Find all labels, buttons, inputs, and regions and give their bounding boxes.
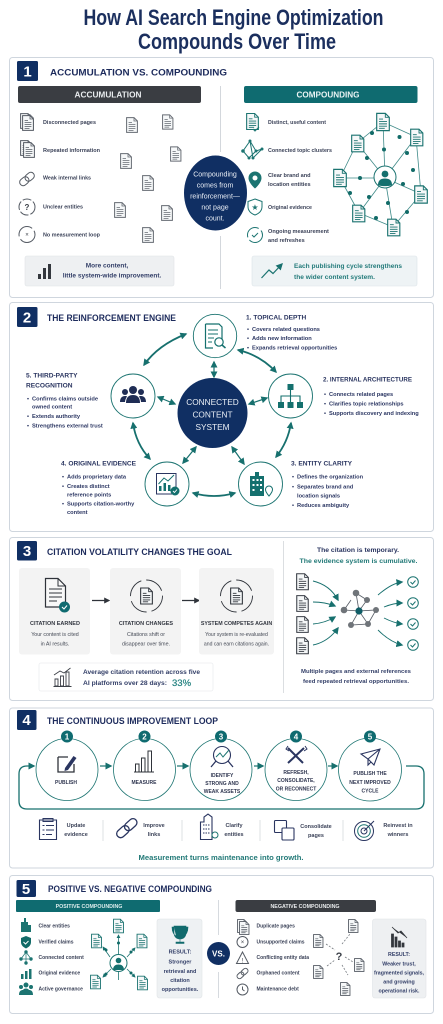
item: original evidence: ★ [251,203,259,212]
step 3: identify: WEAK ASSETS [204,789,241,795]
icon: document in cycle [220,580,252,612]
step 1: publish [36,730,98,800]
compounding header [244,86,418,103]
step 5: publish next cycle: CYCLE [362,788,379,794]
heading: citation is temporary: The evidence system is cumulative. [300,558,418,565]
result: negative [372,919,426,998]
negative list [236,920,309,995]
text: topical depth: Covers related questions [252,327,320,333]
card: citation earned: CITATION EARNED [30,621,80,627]
text: entity clarity: Reduces ambiguity [297,503,350,509]
callout: central message: count. [205,216,225,222]
text: third-party recognition: 5. THIRD-PARTY [26,372,78,380]
action: clarify entities [200,814,244,840]
card: citation earned: in AI results. [41,642,69,648]
panel: the reinforcement engine [10,302,434,532]
item: maintenance debt: Maintenance debt [256,986,299,992]
text: third-party recognition: • [27,414,29,420]
result: positive: opportunities. [162,987,199,993]
result: positive: Stronger [169,960,192,966]
result: negative: RESULT: [388,952,410,958]
compounding header: COMPOUNDING [296,90,360,100]
section number 2 [17,307,38,327]
heading: citation is temporary [300,547,418,565]
icon: trophy [172,926,188,944]
text: entity clarity: 3. ENTITY CLARITY [291,460,353,468]
node 2: internal architecture icon [268,374,312,418]
action: improve links: links [148,832,160,838]
node 4: original evidence icon [145,462,189,506]
text: original evidence: Adds proprietary data [67,474,127,480]
compounding list [241,113,332,244]
text: third-party recognition: Strengthens external trust [32,424,103,430]
positive header: POSITIVE COMPOUNDING [56,904,122,910]
result: negative: fragmented signals, [374,970,425,976]
card: citation earned [19,568,90,654]
negative header: NEGATIVE COMPOUNDING [270,904,340,910]
text: internal architecture: 2. INTERNAL ARCHITECTURE [323,376,413,384]
item: connected content: Connected content [38,955,84,961]
callout: central message [184,156,247,230]
step 5: publish next cycle [338,730,402,801]
item: unclear entities: ? [25,203,30,212]
section number 3: 3 [23,543,31,560]
cycle arrows [133,334,291,496]
action: consolidate pages: Consolidate [300,824,332,830]
text: third-party recognition: Confirms claims outside [32,396,98,402]
node 3: entity clarity icon [238,462,282,506]
text: internal architecture: Connects related pages [329,392,393,398]
card: citation changes: Citations shift or [127,632,165,638]
step 2: measure: MEASURE [131,780,157,786]
section heading: CITATION VOLATILITY CHANGES THE GOAL [47,547,232,557]
item: duplicate pages: Duplicate pages [256,924,295,930]
text: third-party recognition: • [27,396,29,402]
item: distinct content: Distinct, useful content [268,120,326,126]
callout: central message: Compounding [193,172,237,178]
text: original evidence: 4. ORIGINAL EVIDENCE [61,460,137,468]
hub: connected content system [178,378,248,448]
section number 3 [17,541,37,560]
node 1: topical depth icon [193,314,237,358]
return loop arrow [19,766,424,809]
stat: citation retention: 33% [172,678,192,689]
text: original evidence: content [67,510,88,516]
card: citation changes: disappear over time. [122,642,170,648]
item: conflicting data: ! [242,958,244,964]
icon: person [110,954,127,972]
card: system competes again: and can earn citations again. [204,642,269,648]
step 3: identify: 3 [219,732,224,742]
item: clear brand: location entities [268,182,311,188]
action: reinvest in winners: Reinvest in [383,823,413,829]
arrow [92,600,109,602]
section number 4: 4 [22,712,31,729]
text: multiple pages: feed repeated retrieval opportunities. [303,679,409,685]
VS badge [207,942,230,965]
action: clarify entities: entities [224,832,244,838]
hub: connected content system: CONTENT [192,410,233,420]
item: no measurement loop [19,226,101,242]
step 3: identify: IDENTIFY [211,773,234,779]
caption: measurement turns maintenance: Measurement turns maintenance into growth. [138,853,304,862]
positive header [16,900,160,912]
callout: more content: little system-wide improvement. [63,272,161,280]
item: unsupported claims [237,936,305,948]
step 5: publish next cycle: 5 [368,732,373,742]
text: topical depth [246,314,337,352]
item: orphaned content: Orphaned content [256,970,300,976]
action: update evidence: evidence [64,832,88,838]
title [84,5,384,54]
accumulation header: ACCUMULATION [74,90,142,100]
text: original evidence: • [62,474,64,480]
callout: more content [25,256,174,286]
item: repeated information: Repeated information [43,148,101,154]
hub: connected content system: CONNECTED [186,397,239,407]
step 2: measure [114,730,176,800]
callout: central message: comes from [197,182,233,190]
item: original evidence: Original evidence [38,970,80,976]
item: unclear entities: Unclear entities [43,204,83,210]
title: Compounds Over Time [138,29,336,54]
VS badge: VS. [212,950,225,958]
section heading: POSITIVE VS. NEGATIVE COMPOUNDING [48,884,212,894]
step 4: refresh: CONSOLIDATE, [277,778,315,784]
text: original evidence [61,460,137,516]
diagram: negative disconnected network [314,920,364,995]
diagram: positive network [91,919,147,990]
item: disconnected pages: Disconnected pages [43,120,96,126]
text: topical depth: • [247,327,249,333]
action: clarify entities: Clarify [225,823,243,829]
section number 2: 2 [23,310,31,326]
text: multiple pages [301,669,411,685]
text: multiple pages: Multiple pages and external references [301,669,411,675]
result: negative: Weaker trust, [382,962,416,968]
section heading: THE CONTINUOUS IMPROVEMENT LOOP [47,716,218,726]
network diagram: connected pages [334,113,427,236]
stat: citation retention: Average citation retention across five [83,669,201,676]
item: connected clusters: Connected topic clusters [268,148,332,154]
diagram: documents feed network to checks [297,574,418,654]
section heading: THE REINFORCEMENT ENGINE [47,313,176,323]
card: citation earned: Your content is cited [31,632,79,638]
result: positive: citation [170,978,190,984]
step arrows [100,765,337,767]
item: ongoing measurement [248,228,329,244]
callout: more content: More content, [86,262,128,270]
action: update evidence [40,818,88,840]
step 3: identify: STRONG AND [205,781,239,787]
action: consolidate pages: pages [308,833,324,839]
text: internal architecture: • [324,392,326,398]
text: topical depth: • [247,336,249,342]
action: reinvest in winners [354,821,413,840]
item: original evidence: Original evidence [268,205,312,211]
step 2: measure: 2 [142,732,147,742]
item: active governance: Active governance [38,986,83,992]
text: original evidence: Supports citation-worthy [67,502,135,508]
text: original evidence: reference points [67,492,111,498]
callout: central message: reinforcement— [190,194,240,200]
section number 5 [16,880,36,898]
step 4: refresh: REFRESH, [283,770,309,776]
negative header [236,900,376,912]
text: entity clarity: • [292,503,294,509]
section number 1: 1 [23,64,32,80]
text: internal architecture: Clarifies topic relationships [329,402,404,408]
panel: accumulation vs compounding [10,58,434,298]
item: clear brand: Clear brand and [268,173,311,179]
item: weak internal links: Weak internal links [43,176,91,182]
accumulation list [18,114,101,242]
text: internal architecture: Supports discovery and indexing [329,411,419,417]
panel: positive vs negative compounding [10,876,434,1014]
section number 1 [17,61,38,81]
action: consolidate pages [274,820,332,840]
item: conflicting data: Conflicting entity data [256,955,309,961]
panel: citation volatility [10,538,434,700]
item: ongoing measurement: and refreshes [268,238,305,244]
callout: each publishing cycle [252,256,417,286]
item: no measurement loop: × [25,232,29,238]
text: third-party recognition: owned content [32,404,72,410]
item: no measurement loop: No measurement loop [43,232,101,238]
result: positive: retrieval and [164,969,196,975]
icon: document with check [46,578,70,612]
text: entity clarity [291,460,364,509]
text: entity clarity: Separates brand and [297,484,354,490]
item: ongoing measurement: Ongoing measurement [268,229,329,235]
text: entity clarity: • [292,484,294,490]
item: unclear entities [19,199,83,215]
action: improve links: Improve [143,823,165,829]
card: citation changes: CITATION CHANGES [119,621,173,627]
result: positive [157,919,202,998]
action: reinvest in winners: winners [387,832,408,838]
text: internal architecture: • [324,411,326,417]
text: entity clarity: location signals [297,494,340,500]
step 1: publish: 1 [65,732,70,742]
step 4: refresh: OR RECONNECT [276,786,316,792]
card: system competes again [199,568,274,654]
text: internal architecture [323,376,419,417]
hub: connected content system: SYSTEM [195,422,230,432]
section number 5: 5 [22,881,30,898]
node 5: third-party recognition icon [111,374,155,418]
step 5: publish next cycle: NEXT IMPROVED [349,780,391,786]
accumulation header [18,86,201,103]
text: topical depth: Expands retrieval opportunities [252,346,337,352]
panel: continuous improvement loop [10,708,434,868]
arrow [182,600,199,602]
heading: citation is temporary: The citation is temporary. [317,547,399,554]
result: negative: and growing [383,980,415,986]
scattered documents [115,115,181,242]
item: clear brand [248,172,311,188]
card: system competes again: Your system is re-evaluated [205,632,268,638]
text: entity clarity: Defines the organization [297,474,364,480]
text: third-party recognition: Extends authority [32,414,81,420]
callout: each publishing cycle: the wider content system. [294,274,375,281]
item: original evidence [248,199,312,215]
text: internal architecture: • [324,402,326,408]
step 3: identify [190,730,252,800]
step 1: publish: PUBLISH [55,780,77,786]
callout: central message: not page [201,204,229,212]
card: citation changes [110,568,181,654]
stat: citation retention [39,663,213,691]
action: update evidence: Update [67,823,85,829]
step 4: refresh [265,730,327,800]
item: unsupported claims: × [241,940,245,946]
text: third-party recognition: • [27,424,29,430]
section number 4 [17,710,36,730]
stat: citation retention: AI platforms over 28 days: [83,680,167,687]
item: unsupported claims: Unsupported claims [256,940,305,946]
section heading: ACCUMULATION VS. COMPOUNDING [50,68,227,78]
item: verified claims: Verified claims [38,940,74,946]
diagram: negative disconnected network: ? [336,951,343,963]
text: third-party recognition [26,372,103,430]
item: clear entities: Clear entities [38,924,70,930]
item: conflicting data [236,952,309,964]
text: original evidence: Creates distinct [67,484,110,490]
result: positive: RESULT: [169,950,192,956]
text: topical depth: Adds new information [252,336,312,342]
icon: central person [374,166,396,188]
action: improve links [115,817,165,839]
text: topical depth: 1. TOPICAL DEPTH [246,314,306,322]
callout: each publishing cycle: Each publishing cycle strengthens [294,263,402,270]
step 4: refresh: 4 [294,732,299,742]
step 5: publish next cycle: PUBLISH THE [353,771,387,777]
icon: document in cycle [130,580,162,612]
text: original evidence: • [62,484,64,490]
card: system competes again: SYSTEM COMPETES AGAIN [201,621,272,627]
icon: declining bars [392,927,407,947]
text: third-party recognition: RECOGNITION [26,382,73,390]
positive list [19,918,84,995]
text: original evidence: • [62,502,64,508]
text: topical depth: • [247,346,249,352]
text: entity clarity: • [292,474,294,480]
result: negative: operational risk. [379,988,420,994]
